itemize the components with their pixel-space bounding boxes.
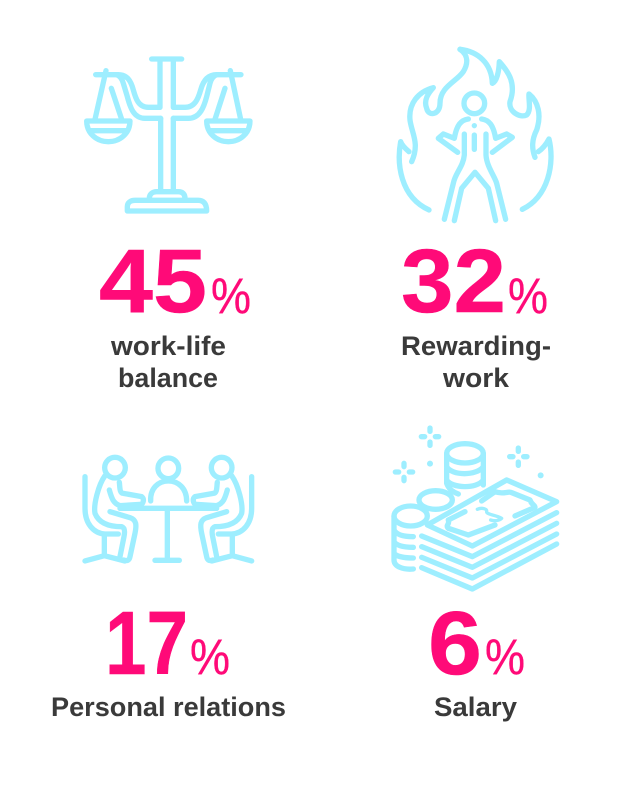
heading: 45% [99,232,251,332]
heading: 45%: 45 [99,232,207,332]
heading: 32% [401,232,548,332]
label: work-life balance: balance [118,363,218,393]
heading: 32%: 32 [401,232,506,332]
label: work-life balance [110,331,226,393]
heading: 17%: 17 [105,594,188,694]
label: Rewarding-work [401,331,551,393]
icon: balance scales [87,59,250,211]
heading: 32%: % [508,268,548,324]
heading: 17%: % [190,629,230,685]
label: Rewarding-work: work [442,363,510,393]
label: Personal relations: Personal relations [51,692,286,722]
icon: three people at a table [85,457,252,561]
label: Salary: Salary [434,692,517,722]
label: work-life balance: work-life [110,331,226,361]
label: Rewarding-work: Rewarding- [401,331,551,361]
icon: money and coins [394,428,557,589]
heading: 6%: 6 [428,594,482,694]
heading: 6%: % [485,629,525,685]
icon: person in flames [399,49,551,221]
heading: 45%: % [211,268,251,324]
heading: 6% [428,594,525,694]
